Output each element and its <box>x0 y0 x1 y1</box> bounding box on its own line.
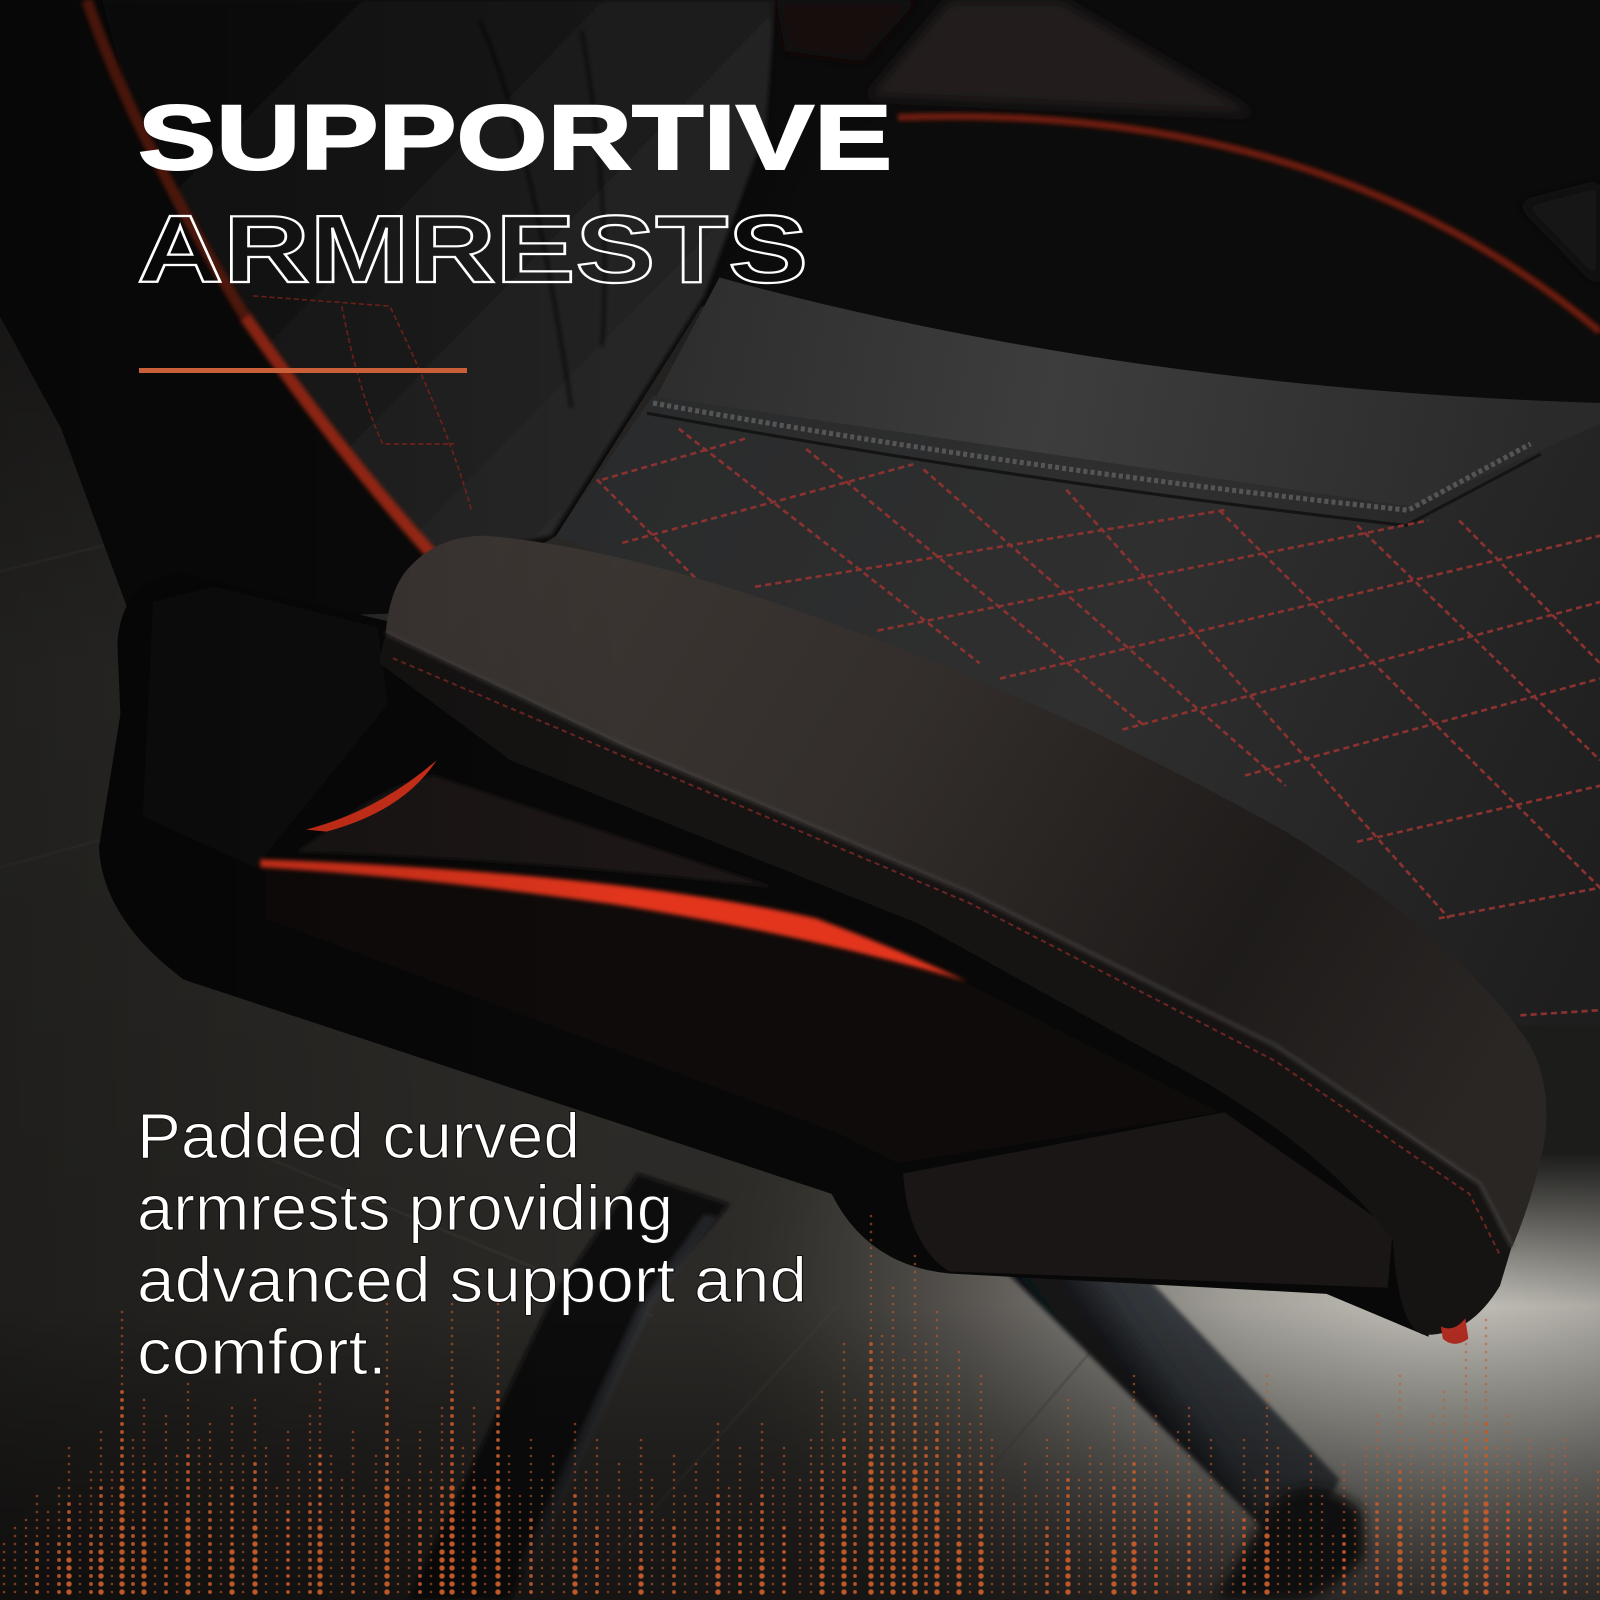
orange divider rule <box>139 368 467 373</box>
armrest side band <box>380 621 1512 1335</box>
body text: advanced support and <box>137 1244 807 1316</box>
shadow right of armrest <box>1469 1026 1600 1306</box>
body text: comfort. <box>137 1316 387 1388</box>
seat front band <box>653 278 1600 510</box>
body text <box>137 1100 807 1388</box>
chair base: right leg and caster <box>1005 1270 1365 1600</box>
halftone large dots <box>69 1456 1486 1600</box>
halftone dot pattern <box>4 1216 1598 1600</box>
chair base: left leg <box>408 1173 730 1600</box>
rear seat cushion with red piping <box>730 116 1600 439</box>
armrest edge highlight <box>386 633 1512 1247</box>
halftone small dots <box>4 1216 1598 1600</box>
backrest <box>0 0 949 622</box>
red piping under armrest <box>260 760 967 982</box>
armrest padded top <box>386 536 1547 1247</box>
armrest stitching <box>393 658 1500 1255</box>
seat with quilted diamond stitching <box>556 396 1600 1143</box>
body text: armrests providing <box>137 1172 673 1244</box>
red piping on backrest <box>87 0 434 556</box>
title: SUPPORTIVE: SUPPORTIVE <box>138 87 892 189</box>
armrest end piping <box>1441 1318 1468 1344</box>
halftone medium dots <box>37 1344 1565 1600</box>
top right background and light strip <box>776 0 1600 429</box>
body text: Padded curved <box>137 1100 580 1172</box>
title: ARMRESTS outline: ARMRESTS <box>137 196 808 303</box>
armrest bracket and underside <box>99 573 1429 1337</box>
